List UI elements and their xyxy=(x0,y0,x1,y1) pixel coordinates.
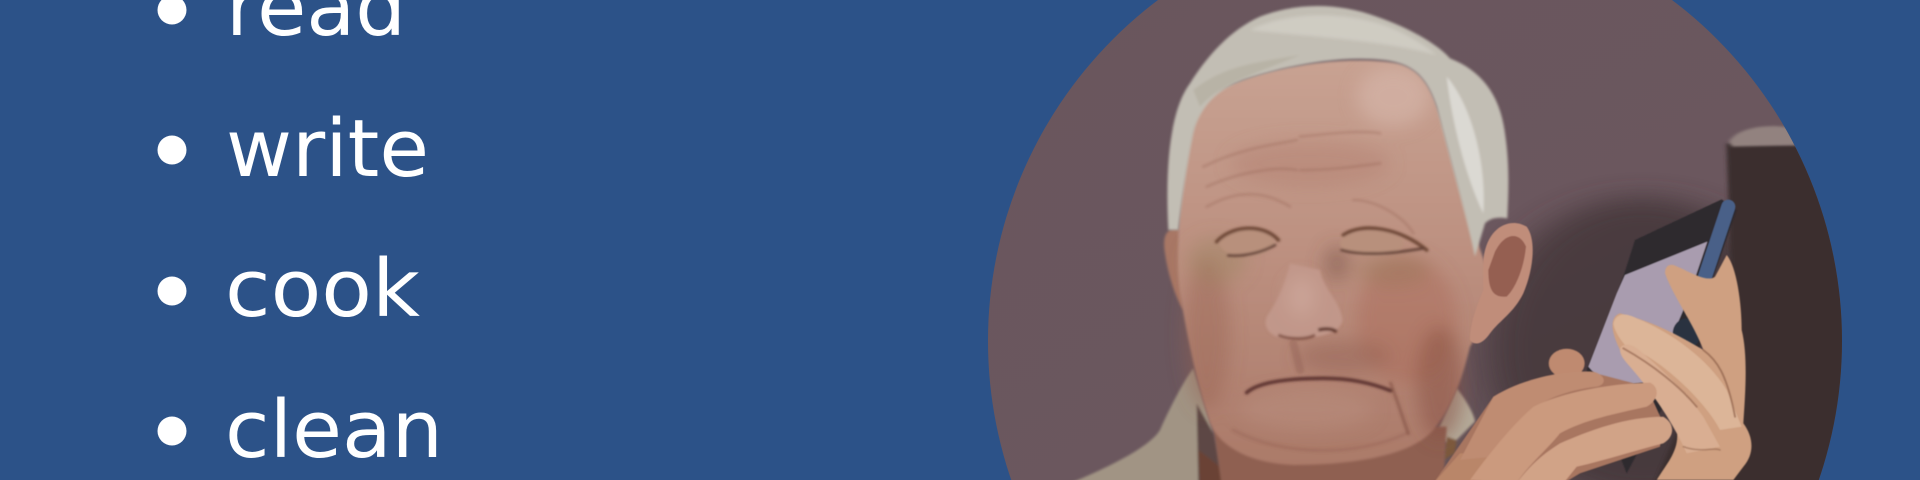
knuckled finger 2 xyxy=(1470,383,1657,480)
knuckled finger 3 xyxy=(1517,417,1672,480)
thumb behind phone xyxy=(1549,349,1585,378)
middle finger xyxy=(1613,315,1742,430)
mouth xyxy=(1233,343,1408,450)
photo backdrop xyxy=(969,0,1889,480)
forehead wrinkles xyxy=(1203,132,1413,233)
man: sweater, face and hair xyxy=(1070,6,1508,480)
nose xyxy=(1266,263,1343,340)
ring finger xyxy=(1620,345,1720,453)
bullet: write: write xyxy=(226,103,429,195)
circular photo: older man holding phone to his ear xyxy=(969,0,1889,480)
sweater xyxy=(1070,368,1475,480)
facial shading xyxy=(1183,67,1463,440)
bullet: cook: cook xyxy=(225,243,420,335)
right ear xyxy=(1470,223,1533,343)
face xyxy=(1178,60,1487,465)
hand xyxy=(1433,255,1751,480)
bullet list xyxy=(158,0,443,476)
skin base beneath the near fingers xyxy=(1433,373,1663,480)
eyes xyxy=(1217,228,1427,257)
phone and hand xyxy=(1433,199,1751,480)
back of left hand xyxy=(1436,454,1486,480)
bullet: clean: clean xyxy=(225,384,443,476)
knuckled finger 1 xyxy=(1460,371,1604,460)
hair xyxy=(1167,6,1508,257)
neck xyxy=(1213,427,1447,480)
back fingers and palm xyxy=(1612,255,1751,480)
left ear xyxy=(1164,229,1183,310)
phone xyxy=(1587,199,1737,473)
